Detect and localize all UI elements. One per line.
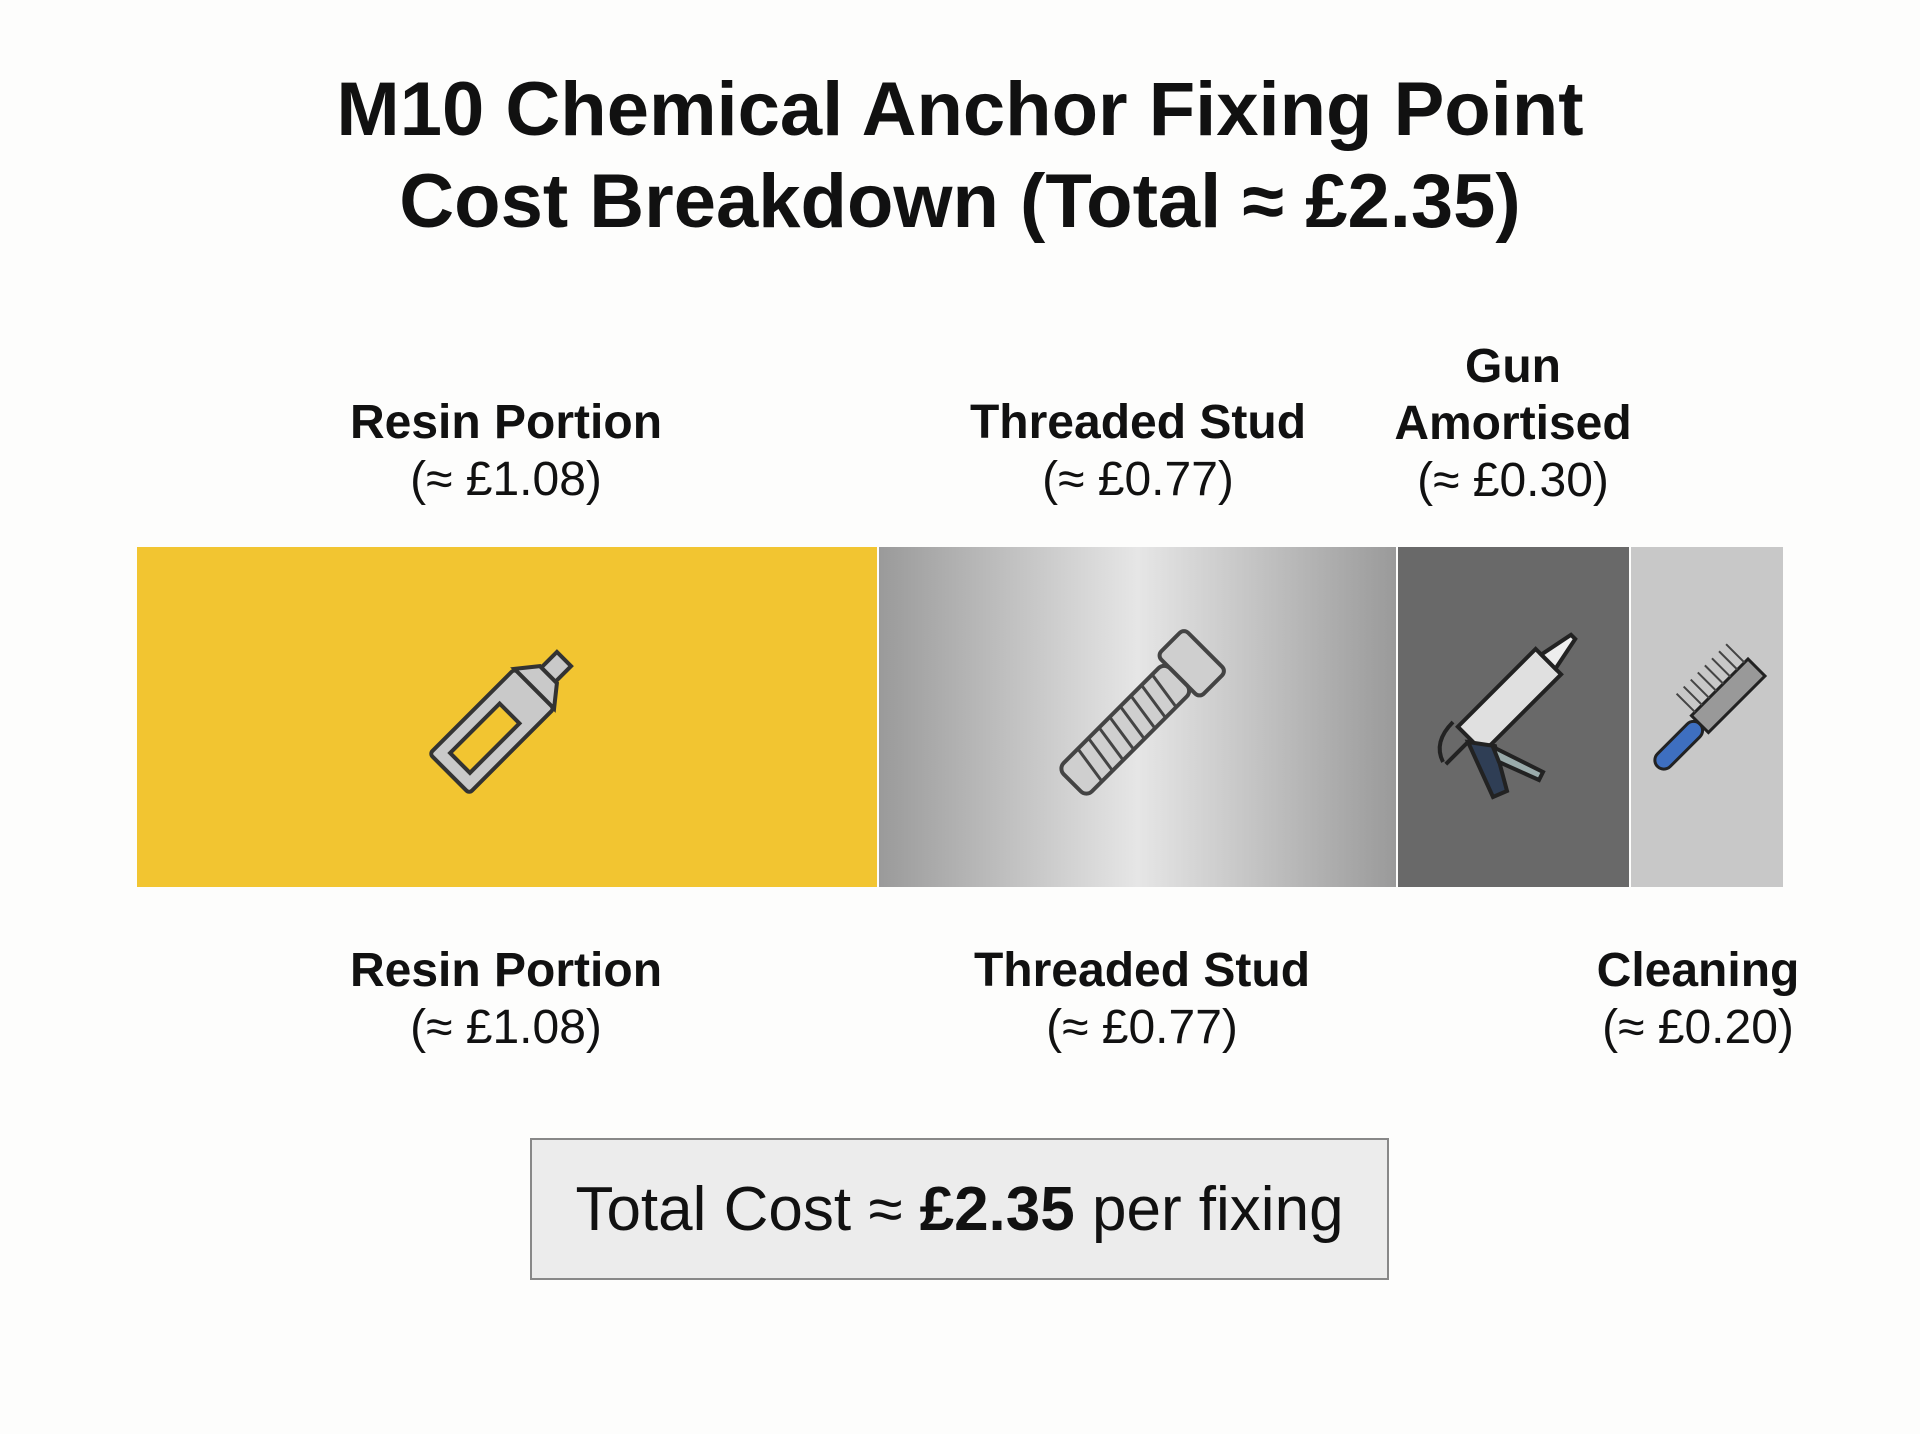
label: gun top: (≈ £0.30) [1417, 454, 1609, 507]
label: resin bottom [350, 944, 662, 1054]
label: stud bottom: (≈ £0.77) [1046, 1001, 1238, 1054]
label: resin top: (≈ £1.08) [410, 453, 602, 506]
segment: stud [879, 547, 1396, 887]
label: cleaning bottom: Cleaning [1597, 944, 1799, 997]
icon: wire brush [1653, 644, 1767, 771]
title: Cost Breakdown (Total ≈ £2.35) [399, 159, 1521, 244]
title: M10 Chemical Anchor Fixing Point [336, 67, 1584, 152]
title [336, 67, 1584, 244]
label: gun top: Amortised [1394, 397, 1632, 450]
label: cleaning bottom: (≈ £0.20) [1602, 1001, 1794, 1054]
label: gun top: Gun [1465, 340, 1561, 393]
icon: caulk gun [1438, 632, 1578, 800]
label: cleaning bottom [1597, 944, 1799, 1054]
label: resin top: Resin Portion [350, 396, 662, 449]
label: stud bottom: Threaded Stud [974, 944, 1310, 997]
icon: bolt [1059, 629, 1226, 796]
segment: gun [1398, 547, 1629, 887]
label: gun top [1394, 340, 1632, 507]
label: resin bottom: (≈ £1.08) [410, 1001, 602, 1054]
stacked bar [137, 547, 1783, 887]
icon: resin tube [429, 649, 574, 794]
total callout: £2.35 [920, 1174, 1075, 1244]
segment: cleaning [1631, 547, 1783, 887]
label: resin bottom: Resin Portion [350, 944, 662, 997]
total callout: Total Cost ≈ per fixing [575, 1174, 1344, 1244]
label: stud top: Threaded Stud [970, 396, 1306, 449]
label: stud top: (≈ £0.77) [1042, 453, 1234, 506]
label: stud top [970, 396, 1306, 506]
label: resin top [350, 396, 662, 506]
label: stud bottom [974, 944, 1310, 1054]
segment: resin [137, 547, 877, 887]
total callout [530, 1138, 1389, 1280]
